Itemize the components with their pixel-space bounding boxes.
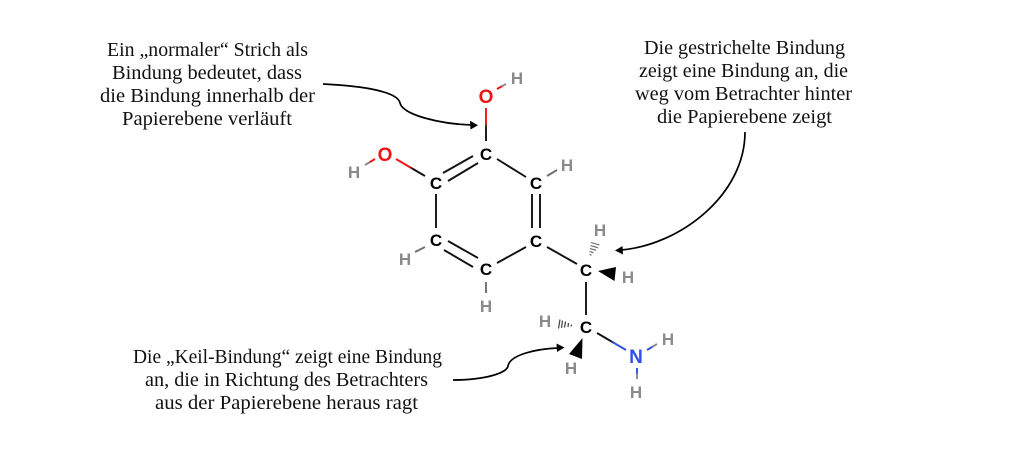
arrow: to normal bond (323, 84, 478, 130)
molecule: atoms: O (378, 145, 392, 166)
molecule: atoms: C (580, 318, 592, 337)
text block: normal bond: die Bindung innerhalb der (100, 85, 315, 107)
text block: wedge bond: Die „Keil-Bindung“ zeigt eine Bindung (133, 346, 442, 368)
text block: normal bond: Papierebene verläuft (122, 108, 292, 130)
molecule: atoms: H (399, 250, 411, 269)
text block: dashed bond: die Papierebene zeigt (657, 106, 832, 128)
molecule: atoms: C (480, 145, 492, 164)
dashed bond upper (590, 242, 600, 255)
molecule: atoms: H (630, 383, 642, 402)
text block: wedge bond: aus der Papierebene heraus ragt (155, 392, 418, 414)
arrow: to dashed bond (615, 132, 745, 254)
text block: dashed bond: weg vom Betrachter hinter (635, 83, 852, 105)
molecule: atoms: C (530, 174, 542, 193)
text block: normal bond: Ein „normaler“ Strich als (107, 39, 308, 61)
text block: dashed bond (635, 37, 852, 128)
molecule: atoms: H (622, 268, 634, 287)
molecule: atoms: H (539, 312, 551, 331)
wedge bond upper (598, 267, 616, 281)
molecule: atoms: H (662, 330, 674, 349)
text block: wedge bond (133, 346, 442, 414)
molecule: atoms: H (565, 359, 577, 378)
text block: wedge bond: an, die in Richtung des Betrachters (145, 369, 428, 391)
molecule: atoms: C (530, 232, 542, 251)
arrow: to wedge bond (453, 344, 564, 380)
molecule: atoms: N (629, 347, 643, 368)
molecule: atoms: O (479, 87, 493, 108)
text block: normal bond: Bindung bedeutet, dass (112, 62, 302, 84)
text block: normal bond (100, 39, 315, 130)
molecule: atoms: H (348, 163, 360, 182)
molecule: atoms: H (561, 156, 573, 175)
molecule: atoms: H (480, 297, 492, 316)
molecule: bonds (365, 84, 657, 379)
molecule: atoms: C (430, 174, 442, 193)
molecule: atoms: H (594, 221, 606, 240)
molecule: atoms: C (430, 231, 442, 250)
molecule: atoms: C (480, 260, 492, 279)
text block: dashed bond: Die gestrichelte Bindung (644, 37, 845, 59)
molecule: atoms: C (580, 261, 592, 280)
molecule: atoms (348, 69, 674, 402)
molecule: atoms: H (511, 69, 523, 88)
text block: dashed bond: zeigt eine Bindung an, die (639, 60, 848, 82)
dashed bond lower (558, 320, 572, 328)
wedge bond lower (569, 338, 582, 359)
